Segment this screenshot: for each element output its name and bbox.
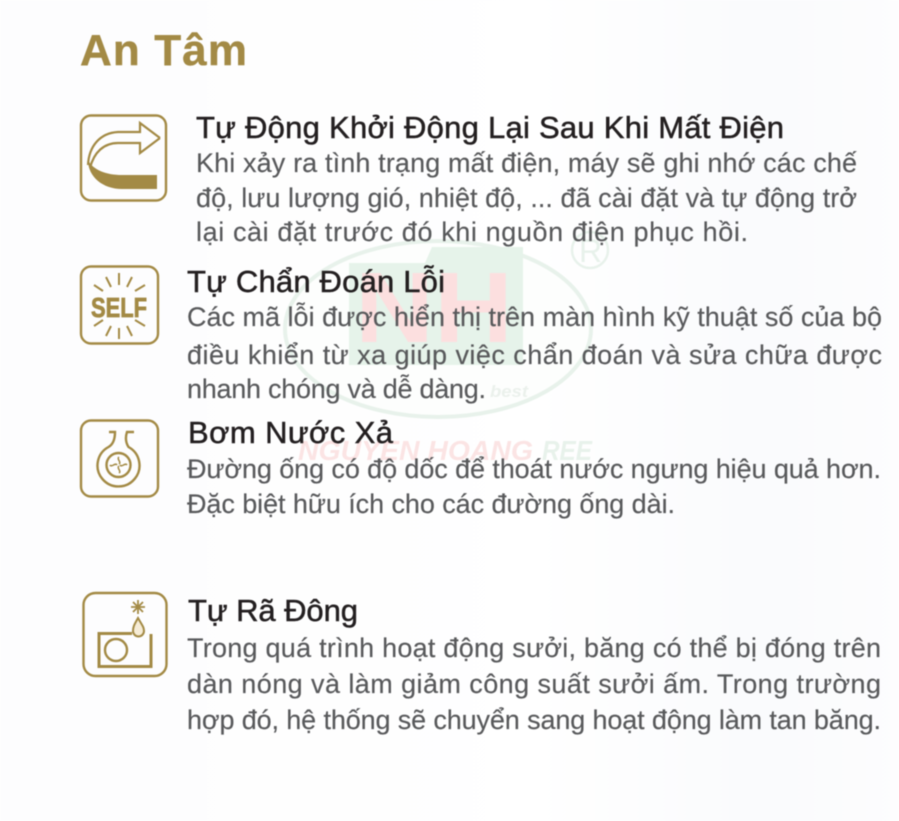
icon: defrost — [84, 593, 166, 676]
icon: restart arrow — [81, 116, 166, 200]
watermark logo: NGUYEN HOANG — [298, 435, 533, 466]
icon: self diagnosis — [81, 266, 158, 344]
icon: self diagnosis: SELF — [91, 292, 147, 323]
text block: defrost: hợp đó, hệ thống sẽ chuyển sang hoạt động làm tan băng. — [187, 705, 881, 735]
heading: restart: Tự Động Khởi Động Lại Sau Khi Mất Điện — [196, 110, 784, 145]
heading: self diagnosis: Tự Chẩn Đoán Lỗi — [187, 264, 445, 299]
watermark logo: best — [490, 382, 529, 401]
watermark logo — [285, 232, 608, 466]
text block: drain pump — [187, 454, 881, 519]
text block: restart: độ, lưu lượng gió, nhiệt độ, ... đã cài đặt và tự động trở — [196, 183, 857, 213]
text block: restart — [196, 148, 857, 247]
text block: defrost: Trong quá trình hoạt động sưởi, băng có thể bị đóng trên — [187, 633, 881, 663]
watermark logo: REE — [542, 435, 593, 466]
title: An Tâm — [80, 26, 247, 75]
text block: defrost — [187, 633, 881, 735]
text block: drain pump: Đường ống có độ dốc để thoát nước ngưng hiệu quả hơn. — [187, 454, 881, 484]
watermark logo: R — [579, 233, 602, 269]
text block: restart: Khi xảy ra tình trạng mất điện, máy sẽ ghi nhớ các chế — [196, 148, 857, 178]
icon: drain pump — [81, 420, 158, 496]
watermark logo: NH — [355, 252, 513, 364]
heading: drain pump: Bơm Nước Xả — [188, 415, 394, 450]
text block: self diagnosis — [187, 301, 882, 404]
text block: self diagnosis: điều khiển từ xa giúp việc chẩn đoán và sửa chữa được — [187, 340, 882, 370]
heading: defrost: Tự Rã Đông — [188, 593, 358, 628]
text block: self diagnosis: nhanh chóng và dễ dàng. — [187, 373, 486, 404]
text block: defrost: dàn nóng và làm giảm công suất sưởi ấm. Trong trường — [187, 669, 881, 699]
text block: restart: lại cài đặt trước đó khi nguồn điện phục hồi. — [196, 217, 748, 247]
text block: drain pump: Đặc biệt hữu ích cho các đường ống dài. — [187, 489, 675, 519]
text block: self diagnosis: Các mã lỗi được hiển thị trên màn hình kỹ thuật số của bộ — [187, 301, 882, 332]
